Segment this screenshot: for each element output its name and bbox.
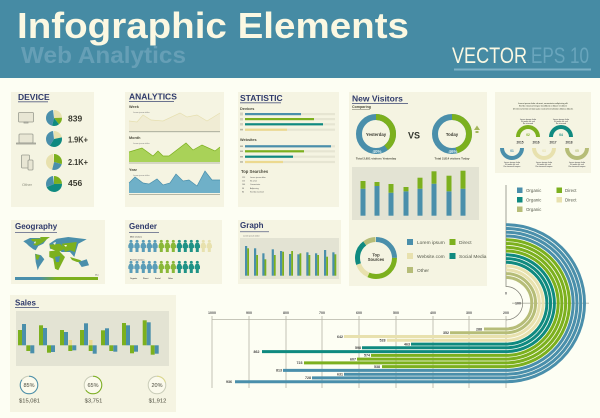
- stacked bar chart: [352, 167, 479, 220]
- heading: graph: Graph: [240, 221, 264, 230]
- pie: mobile share: [50, 158, 58, 166]
- tracks: blue: [235, 225, 584, 382]
- gauge: 85%: 85%: [23, 383, 35, 389]
- chart: year: Year: [129, 168, 138, 172]
- pie: monitor share: [50, 114, 58, 122]
- arc captions: Lorem ipsum dolor: [569, 162, 585, 164]
- list: top searches: Consectetur: [250, 183, 261, 186]
- arc captions: Lorem ipsum dolor: [520, 119, 536, 121]
- header banner: [0, 0, 600, 78]
- panel: new visitors: [349, 92, 487, 286]
- legend: tracks: Direct: [565, 198, 577, 202]
- panel: gender: [125, 220, 222, 284]
- arc captions: Lorem ipsum dolor: [536, 162, 552, 164]
- heading: device: DEVICE: [18, 92, 50, 102]
- arc captions: Do eiusmod tempor: [569, 165, 586, 168]
- arc captions: Do eiusmod: [556, 123, 566, 125]
- tracks: green: [304, 240, 569, 367]
- arc captions: Sit amet elit sed: [521, 120, 535, 123]
- positive green bars: [18, 320, 147, 345]
- donut: yesterday: 40%: [372, 149, 382, 154]
- gauge: 20%: 20%: [151, 383, 163, 389]
- icon: tablet and phone: [22, 155, 33, 170]
- heading: analytics: ANALYTICS: [129, 92, 177, 102]
- track values: 607: [350, 357, 356, 361]
- negative blue bars: [30, 345, 159, 354]
- legend: top sources: Social Media: [459, 254, 487, 260]
- track values: 728: [305, 376, 311, 380]
- arc numbers and years: [510, 133, 579, 153]
- legend: top sources: Lorem ipsum: [417, 240, 445, 246]
- list: top searches: 123: [242, 177, 245, 179]
- axis labels: 300: [466, 311, 472, 315]
- arc numbers and years: 2016: [532, 140, 540, 144]
- arc numbers and years: 2018: [565, 140, 573, 144]
- arc numbers and years: 2015: [516, 140, 524, 144]
- gender legend: Organic: [130, 278, 137, 280]
- chart: week: Lorem ipsum dolor: [133, 112, 150, 114]
- chart: month: Month: [129, 136, 141, 140]
- heading: geography: Geography: [15, 222, 58, 231]
- donut: yesterday: [356, 117, 396, 160]
- chart: curved track chart: [208, 185, 589, 388]
- track values: 642: [337, 335, 343, 339]
- donut: yesterday: Total 2,651 visitors Yesterday: [356, 156, 396, 160]
- axis grid: [212, 303, 589, 388]
- track values: 288: [476, 327, 482, 331]
- bar chart: sales: [16, 311, 169, 366]
- chart: year: [129, 168, 220, 195]
- legend: tracks: Direct: [565, 188, 577, 193]
- arc captions: Do eiusmod tempor: [504, 165, 521, 168]
- panel: geography: [11, 220, 105, 284]
- axis labels: 1000: [208, 311, 216, 315]
- cream bars: [68, 340, 92, 345]
- axis labels: 400: [430, 311, 436, 315]
- value: 839: 839: [68, 114, 82, 124]
- panel: timeline arcs: [495, 92, 591, 173]
- legend: tracks: [517, 188, 577, 212]
- legend: top sources: [407, 239, 487, 274]
- donut: top sources: Sources: [368, 257, 385, 262]
- track values: 528: [380, 339, 386, 343]
- arc captions: Do eiusmod: [523, 123, 533, 125]
- track values: 631: [337, 372, 343, 376]
- gender legend: [130, 277, 173, 280]
- label: other: Other: [22, 182, 33, 187]
- track values: 463: [404, 342, 410, 346]
- legend: top sources: Other: [417, 268, 429, 274]
- chart: week: Week: [129, 105, 140, 109]
- gauge: 20%: $1,912: [149, 398, 166, 404]
- intro text: Ut enim ad minim veniam quis nostrud exercitation ullamco laboris: [513, 108, 573, 110]
- value: 1.9K+: 1.9K+: [68, 134, 88, 144]
- pie: laptop share: [50, 135, 58, 143]
- track values: 538: [374, 365, 380, 369]
- panel: statistic: [238, 92, 339, 207]
- value: 2.1K+: 2.1K+: [68, 157, 88, 167]
- gender legend: Social: [155, 278, 161, 280]
- axis labels: 800: [283, 311, 289, 315]
- list: top searches: 96: [242, 188, 244, 190]
- heading: gender: Gender: [129, 222, 157, 231]
- vector badge: [452, 43, 591, 70]
- axis labels: 0: [505, 292, 507, 296]
- arc captions: Sit amet elit sed: [537, 163, 551, 166]
- world map: [23, 237, 89, 270]
- donut: top sources: [358, 240, 394, 276]
- label: comparing: Comparing: [352, 105, 371, 109]
- list: top searches: Sit amet: [250, 180, 257, 182]
- arc 02 and 04: [518, 127, 571, 137]
- heading: new visitors: New Visitors: [352, 94, 403, 104]
- gauge: 85%: [19, 376, 40, 404]
- donut: today: Today: [446, 132, 459, 137]
- icon: laptop: [16, 134, 36, 144]
- intro text: Lorem ipsum dolor sit amet, consectetur adipiscing elit: [518, 102, 568, 105]
- chart: year: Lorem ipsum dolor: [133, 175, 150, 177]
- panel: sales: [10, 295, 176, 412]
- pictogram: female visitors: Female visitors: [130, 258, 145, 262]
- tracks: teal: [262, 255, 554, 352]
- arc captions: [504, 119, 586, 168]
- donut: today: 46%: [448, 149, 458, 154]
- axis labels: 500: [393, 311, 399, 315]
- axis labels: 700: [319, 311, 325, 315]
- list: top searches: 84: [242, 192, 244, 194]
- list: top searches: Adipiscing: [250, 187, 259, 190]
- track values: 936: [226, 380, 232, 384]
- gauge: 20%: [148, 376, 166, 404]
- heading: statistic: STATISTIC: [240, 93, 283, 103]
- vector badge: VECTOR: [452, 43, 527, 68]
- panel: analytics: [125, 92, 224, 207]
- axis labels: 200: [503, 311, 509, 315]
- icon: monitor: [18, 112, 34, 123]
- heading: sales: Sales: [15, 298, 36, 308]
- donut: top sources: Top: [372, 252, 380, 258]
- legend: tracks: Organic: [526, 207, 542, 212]
- axis labels: [208, 292, 521, 315]
- panel: graph: [238, 220, 341, 284]
- list: top searches: Sed do eiusmod: [250, 192, 264, 194]
- arc captions: Lorem ipsum dolor: [553, 119, 569, 121]
- panel: device: [11, 92, 94, 207]
- tracks: olive: [450, 274, 536, 333]
- arc captions: Lorem ipsum dolor: [504, 162, 520, 164]
- pie: other share: [50, 180, 58, 188]
- arc numbers and years: 05: [575, 149, 579, 153]
- arc captions: Sit amet elit sed: [570, 163, 584, 166]
- arc captions: Sit amet elit sed: [554, 120, 568, 123]
- list: top searches: Lorem ipsum dolor: [250, 176, 266, 179]
- legend: top sources: Website.com: [417, 254, 445, 260]
- chart: week: [129, 105, 220, 132]
- label: vs: VS: [408, 130, 420, 140]
- donut: today: Total 2,814 visitors Today: [435, 156, 470, 160]
- axis labels: 900: [246, 311, 252, 315]
- gender legend: Direct: [143, 277, 149, 280]
- intro text: [513, 102, 573, 110]
- value: 456: 456: [68, 178, 82, 188]
- track values: 574: [364, 354, 370, 358]
- bar chart: graph: [240, 238, 339, 279]
- track values: 352: [443, 331, 449, 335]
- pictogram: male visitors: Male visitors: [130, 236, 143, 238]
- track values: 813: [276, 369, 282, 373]
- list: top searches: Top Searches: [241, 169, 269, 174]
- axis curve: [506, 185, 523, 320]
- intro text: Sed do eiusmod tempor incididunt ut labore et dolore: [519, 104, 567, 108]
- track values: 598: [355, 346, 361, 350]
- track values: [226, 327, 482, 384]
- legend: tracks: Organic: [526, 198, 542, 202]
- chart: month: Lorem ipsum dolor: [133, 143, 150, 145]
- positive blue bars: [22, 322, 151, 345]
- arc captions: Sit amet elit sed: [505, 163, 519, 166]
- arc numbers and years: 03: [542, 149, 546, 153]
- arc captions: Do eiusmod tempor: [536, 165, 553, 168]
- subtitle: Web Analytics: [21, 42, 186, 68]
- arc numbers and years: 2017: [549, 140, 557, 144]
- label: graph note: Lorem ipsum dolor: [243, 236, 260, 238]
- arc numbers and years: 01: [510, 149, 514, 153]
- gauge: 65%: [84, 376, 102, 404]
- track values: 862: [254, 350, 260, 354]
- list: top searches: [241, 169, 269, 194]
- legend: tracks: Organic: [526, 188, 542, 193]
- tracks: cream: [344, 266, 543, 340]
- track values: 723: [296, 361, 302, 365]
- title: Infographic Elements: [17, 5, 409, 46]
- gauge: 85%: $15,081: [19, 398, 40, 404]
- gradient bar: Max: [95, 274, 99, 276]
- arc 01, 03 and 05: [502, 148, 587, 158]
- arc numbers and years: 02: [526, 133, 530, 137]
- gauge: 65%: 65%: [87, 383, 99, 389]
- axis labels: 100: [515, 302, 521, 306]
- arc numbers and years: 04: [559, 133, 563, 137]
- bars: devices: Devices: [240, 107, 254, 111]
- icon: up arrow: [474, 126, 480, 133]
- axis labels: 600: [356, 311, 362, 315]
- list: top searches: 104: [242, 184, 245, 186]
- chart: month: [129, 136, 220, 164]
- negative green bars: [26, 345, 155, 355]
- gender legend: Other: [168, 277, 173, 280]
- donut: yesterday: Yesterday: [366, 132, 387, 137]
- gauge: 65%: $3,751: [85, 398, 102, 404]
- donut: today: [435, 117, 470, 160]
- legend: top sources: Direct: [459, 240, 472, 246]
- bars: websites: Websites: [240, 138, 257, 142]
- list: top searches: 115: [242, 180, 245, 182]
